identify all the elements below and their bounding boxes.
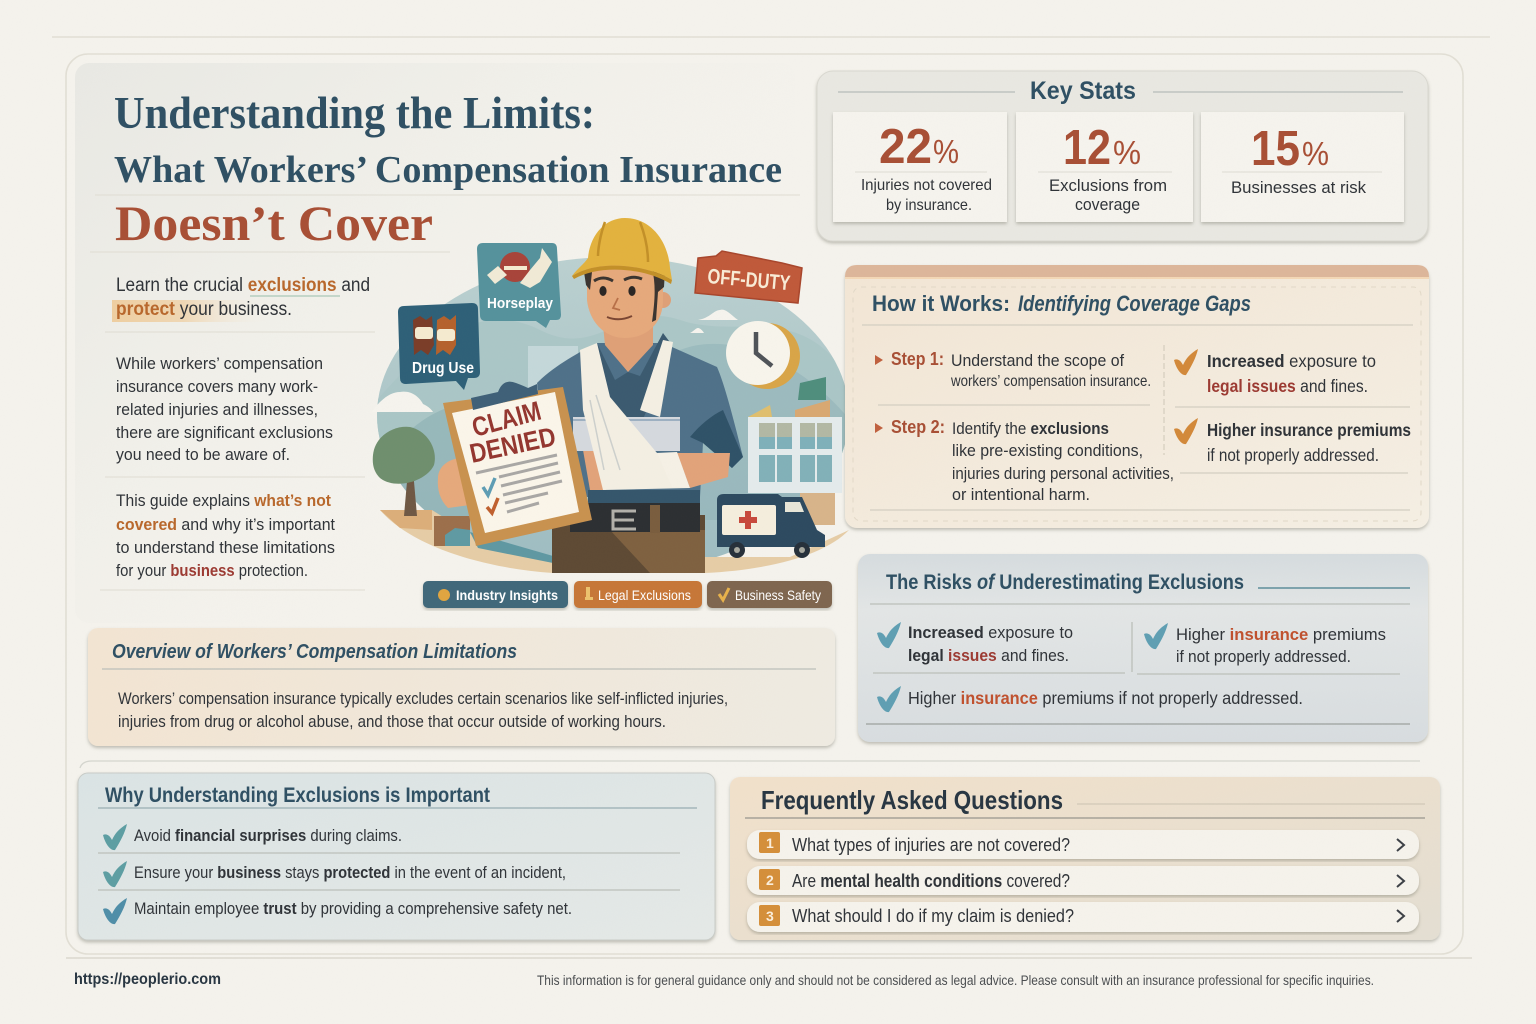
step 1: Understand the scope of xyxy=(951,351,1124,370)
intro text xyxy=(105,275,375,332)
body paragraph 2: to understand these limitations xyxy=(116,538,335,557)
risk item 2: if not properly addressed. xyxy=(1176,647,1351,666)
item 3 xyxy=(103,898,572,924)
head xyxy=(655,292,671,308)
consequence 1: legal issues and fines. xyxy=(1207,376,1368,396)
tag: industry insights xyxy=(423,581,568,608)
risk item 3: Higher insurance premiums if not properly addressed. xyxy=(908,688,1303,708)
question 3: What should I do if my claim is denied? xyxy=(792,906,1074,926)
body paragraph 2 xyxy=(100,491,365,590)
ground xyxy=(380,510,553,573)
body paragraph 1: While workers’ compensation xyxy=(116,354,323,373)
question 1: What types of injuries are not covered? xyxy=(792,835,1070,855)
body paragraph 2: This guide explains what’s not xyxy=(116,491,331,510)
step 2: injuries during personal activities, xyxy=(952,464,1174,483)
cloud xyxy=(372,392,433,412)
question 3 xyxy=(747,902,1419,932)
waistband and belt xyxy=(588,490,700,504)
shirt xyxy=(537,343,743,497)
stat: 15%: 15 xyxy=(1251,122,1300,176)
risk item 1: Increased exposure to xyxy=(908,623,1073,642)
item 1: Avoid financial surprises during claims. xyxy=(134,826,402,845)
heading: How it Works: xyxy=(872,291,1010,316)
body paragraph 1 xyxy=(105,354,365,477)
stat: 22%: by insurance. xyxy=(886,197,972,214)
step 2: Step 2: xyxy=(891,417,945,437)
stat: 15%: Businesses at risk xyxy=(1231,178,1366,197)
question 2: 2 xyxy=(766,872,774,888)
bubble: drug use xyxy=(398,303,480,390)
illustration: worker scene xyxy=(370,218,860,580)
footer: This information is for general guidance only and should not be considered as legal advice. Please consult with an insurance professional for specific inquiries. xyxy=(537,972,1374,988)
stat: 12%: % xyxy=(1113,134,1141,171)
item 3: Maintain employee trust by providing a comprehensive safety net. xyxy=(134,899,572,918)
trousers xyxy=(552,515,705,573)
tag: business safety: Business Safety xyxy=(735,587,821,603)
heading: Identifying Coverage Gaps xyxy=(1018,291,1251,316)
clipboard xyxy=(438,382,592,546)
sign: off-duty: OFF-DUTY xyxy=(707,265,791,295)
panel: how it works xyxy=(845,265,1429,528)
item 1 xyxy=(103,824,402,850)
bubble: horseplay: Horseplay xyxy=(487,295,554,312)
tag: business safety xyxy=(707,581,832,608)
step 1 xyxy=(875,349,1151,390)
panel: key stats xyxy=(817,71,1428,241)
item 2 xyxy=(103,861,566,887)
stat: 22% xyxy=(833,112,1007,222)
stat: 22%: % xyxy=(933,133,959,170)
heading xyxy=(862,291,1413,325)
consequence 1 xyxy=(1174,349,1376,396)
body paragraph 1: there are significant exclusions xyxy=(116,423,333,442)
bubble: drug use: Drug Use xyxy=(412,360,474,377)
consequence 2: Higher insurance premiums xyxy=(1207,420,1411,440)
question 3: 3 xyxy=(766,908,774,924)
sign: off-duty xyxy=(695,251,802,303)
consequence 1: Increased exposure to xyxy=(1207,351,1376,371)
footer xyxy=(66,958,1472,988)
clock xyxy=(726,321,800,389)
title xyxy=(90,88,800,252)
question 2: Are mental health conditions covered? xyxy=(792,871,1070,891)
step 1: Step 1: xyxy=(891,349,944,369)
footer: https://peoplerio.com xyxy=(74,971,221,988)
body paragraph 1: related injuries and illnesses, xyxy=(116,400,318,419)
risk item 2 xyxy=(1144,623,1386,666)
clipboard: CLAIM xyxy=(469,396,544,443)
tag: legal exclusions xyxy=(574,581,702,608)
neck and collar xyxy=(603,325,653,372)
heading: The Risks of Underestimating Exclusions xyxy=(886,571,1244,594)
stat: 15% xyxy=(1201,112,1404,222)
body paragraph 1: you need to be aware of. xyxy=(116,445,290,464)
stat: 12% xyxy=(1016,112,1193,222)
panel: why xyxy=(78,761,1420,940)
body: Workers’ compensation insurance typically excludes certain scenarios like self-inflicted injuries, xyxy=(118,689,728,708)
tag: legal exclusions: Legal Exclusions xyxy=(598,587,691,603)
bubble: horseplay xyxy=(477,243,561,328)
step 2 xyxy=(875,417,1174,504)
forearm xyxy=(677,453,730,488)
risk item 1 xyxy=(877,622,1073,665)
title: Understanding the Limits: xyxy=(114,88,595,138)
heading: Overview of Workers’ Compensation Limitations xyxy=(112,641,517,663)
stat: 12%: coverage xyxy=(1075,195,1140,214)
stat: 22%: Injuries not covered xyxy=(861,177,992,194)
risk item 1: legal issues and fines. xyxy=(908,646,1069,665)
stat: 22%: 22 xyxy=(879,120,932,174)
body xyxy=(118,689,728,731)
body paragraph 1: insurance covers many work- xyxy=(116,377,318,396)
title: Doesn’t Cover xyxy=(115,195,433,251)
worker xyxy=(537,218,743,573)
risk item 3 xyxy=(877,686,1303,712)
clipboard: DENIED xyxy=(467,421,558,469)
body paragraph 2: covered and why it’s important xyxy=(116,515,335,534)
step 2: Identify the exclusions xyxy=(952,419,1109,438)
intro text: protect your business. xyxy=(116,299,292,320)
tag: industry insights: Industry Insights xyxy=(456,587,558,603)
panel: overview xyxy=(88,628,835,746)
ambulance xyxy=(717,494,825,558)
stat: 12%: 12 xyxy=(1063,121,1111,175)
title: What Workers’ Compensation Insurance xyxy=(114,149,782,191)
heading: Why Understanding Exclusions is Important xyxy=(105,784,490,807)
hard hat xyxy=(572,218,672,280)
tablet xyxy=(573,417,680,451)
body: injuries from drug or alcohol abuse, and those that occur outside of working hours. xyxy=(118,712,666,731)
panel: faq xyxy=(730,777,1440,940)
sling xyxy=(580,343,690,490)
consequence 2 xyxy=(1174,418,1411,465)
panel: risks xyxy=(858,554,1428,742)
item 2: Ensure your business stays protected in the event of an incident, xyxy=(134,863,566,882)
question 1 xyxy=(747,830,1419,859)
stat: 12%: Exclusions from xyxy=(1049,176,1167,195)
question 1: 1 xyxy=(766,835,774,851)
consequence 2: if not properly addressed. xyxy=(1207,445,1379,465)
question 2 xyxy=(747,866,1419,895)
header tint panel xyxy=(75,63,795,623)
heading: Frequently Asked Questions xyxy=(761,785,1063,815)
step 2: or intentional harm. xyxy=(952,485,1090,504)
step 2: like pre-existing conditions, xyxy=(952,441,1143,460)
tree xyxy=(373,427,435,516)
risk item 2: Higher insurance premiums xyxy=(1176,625,1386,644)
heading: key stats: Key Stats xyxy=(1030,77,1136,105)
scene backdrop xyxy=(370,250,860,580)
building xyxy=(748,417,842,525)
body paragraph 2: for your business protection. xyxy=(116,561,308,580)
stat: 15%: % xyxy=(1302,135,1329,172)
intro text: Learn the crucial exclusions and xyxy=(116,275,370,296)
step 1: workers’ compensation insurance. xyxy=(950,373,1151,390)
